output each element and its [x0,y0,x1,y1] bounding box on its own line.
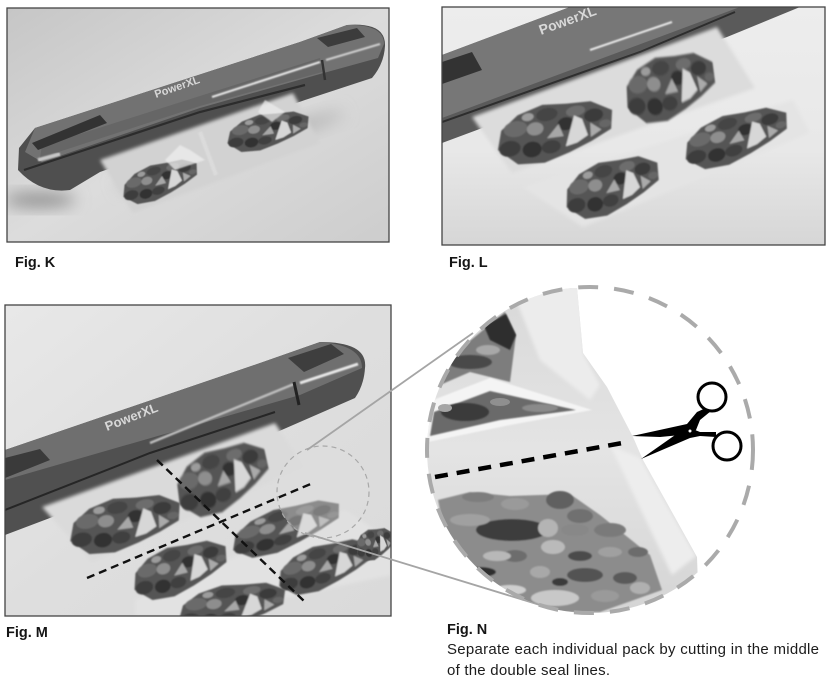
upper nut wedge [443,312,517,384]
panel: Fig. M photo [5,305,399,637]
callout lines [305,333,540,605]
lower nut mass [438,491,662,612]
caption: Fig. M: Fig. M [6,625,48,641]
caption: Fig. K: Fig. K [15,255,56,271]
frame K [7,8,389,242]
description: of the double seal lines. [447,662,610,679]
vacuum sealer body: PowerXL [153,74,202,101]
vacuum sealer body: PowerXL [103,400,160,434]
frame M [5,305,391,616]
magnified bag photo [427,288,698,613]
dashed magnifier ring [427,287,753,613]
caption: Fig. N [447,622,823,679]
icon: scissors [632,383,741,460]
bags with nuts [472,27,810,227]
panel: Fig. K photo [4,8,389,242]
cut line [435,442,628,477]
vacuum bag with nuts [100,93,320,213]
cut lines [87,460,313,602]
zoom circle on photo [277,446,369,538]
caption: Fig. L: Fig. L [449,255,488,271]
frame L [442,7,825,245]
vacuum sealer body [5,342,365,535]
panel: Fig. N magnified detail [420,280,753,620]
vacuum sealer body [442,2,800,143]
description: Separate each individual pack by cutting in the middle [447,641,819,658]
bags with nuts [40,421,390,616]
vacuum sealer body: PowerXL [537,2,599,38]
middle nut wedge [428,378,592,442]
panel: Fig. L photo [442,2,825,245]
caption: Fig. N: Fig. N [447,622,487,638]
vacuum sealer body [18,25,385,191]
